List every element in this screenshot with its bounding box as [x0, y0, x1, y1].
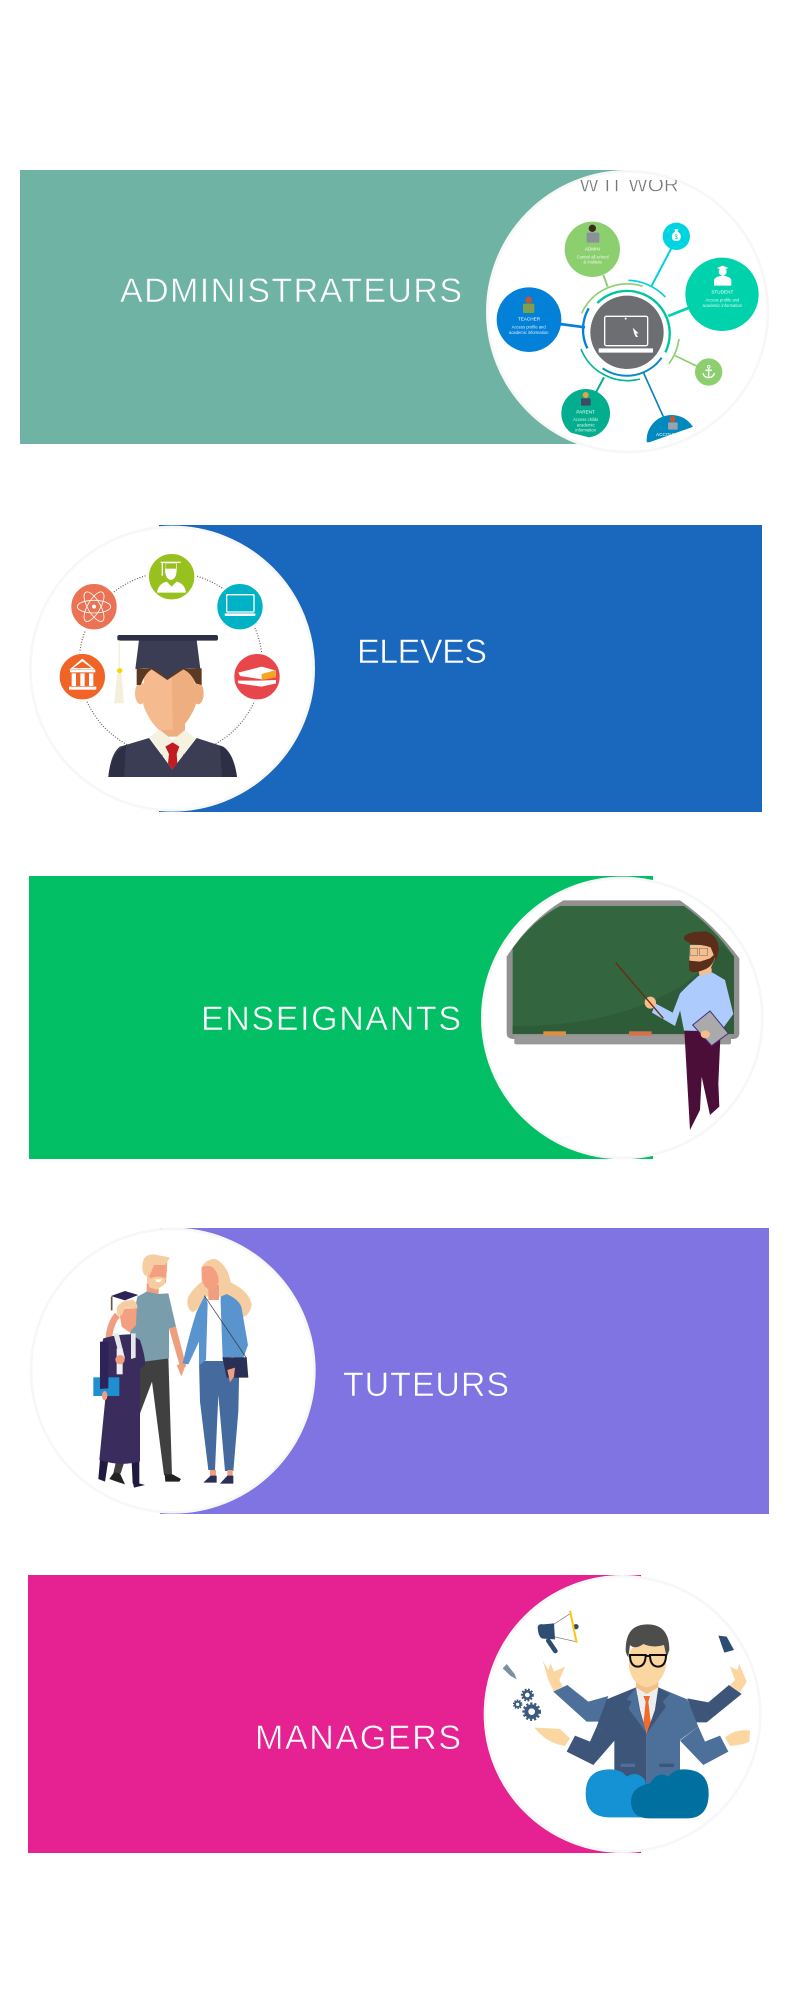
clipped heading: how it works: HOW IT WORKS	[548, 173, 706, 196]
diploma	[117, 1348, 123, 1374]
band: pink	[28, 1575, 641, 1853]
panel: enseignants	[29, 876, 762, 1159]
band: purple	[160, 1228, 769, 1514]
tie	[643, 1696, 651, 1733]
icon: books	[233, 653, 281, 700]
pointer	[616, 963, 663, 1018]
upper arms	[553, 1685, 608, 1722]
face	[202, 1266, 220, 1290]
tassel	[109, 1297, 114, 1310]
jacket	[597, 1687, 647, 1787]
father	[109, 1254, 187, 1484]
upper hands	[543, 1661, 747, 1693]
jacket right	[221, 1294, 248, 1372]
panel: managers	[28, 1575, 760, 1853]
pockets	[621, 1764, 635, 1767]
cap	[135, 640, 200, 679]
arm	[169, 1327, 186, 1367]
trousers	[113, 1357, 172, 1475]
illustration: multitasking manager	[485, 1576, 760, 1852]
sash	[113, 1333, 136, 1359]
node: money: $	[675, 235, 679, 241]
node: parent: information	[575, 428, 597, 433]
circle background	[485, 1576, 760, 1852]
icon: bank	[59, 653, 106, 700]
glasses	[630, 1655, 666, 1667]
illustration: teacher at blackboard	[482, 878, 762, 1158]
mother	[183, 1259, 252, 1484]
cap board	[117, 635, 218, 641]
tie	[165, 742, 179, 769]
left cloud	[586, 1769, 650, 1817]
shoes	[109, 1472, 181, 1484]
node: student: STUDENT	[711, 290, 733, 295]
infographic canvas	[20, 170, 769, 1853]
lower hands	[534, 1728, 750, 1746]
manager figure	[534, 1624, 750, 1818]
label: tuteurs: TUTEURS	[343, 1366, 509, 1404]
hair	[684, 931, 719, 961]
hand	[115, 1355, 125, 1364]
central laptop disc	[590, 296, 664, 369]
node: anchor	[695, 358, 722, 386]
circle background	[30, 527, 314, 810]
icon: gears	[514, 1690, 539, 1719]
beard	[146, 1273, 166, 1290]
hair	[626, 1624, 669, 1657]
jacket left	[183, 1295, 208, 1366]
gown sleeves	[108, 745, 237, 777]
cap	[111, 1291, 138, 1300]
face	[629, 1644, 666, 1687]
band: teal	[20, 170, 627, 444]
gown	[99, 1334, 145, 1464]
shoes	[133, 1482, 145, 1488]
illustration: graduate student	[30, 527, 314, 810]
node: parent: PARENT	[576, 409, 595, 414]
panel: tuteurs	[31, 1228, 769, 1514]
neck	[208, 1285, 219, 1300]
tassel	[114, 640, 124, 703]
blackboard	[507, 900, 739, 1044]
rings around the laptop	[581, 280, 679, 381]
beard	[689, 953, 716, 972]
face	[689, 945, 715, 970]
panel: administrateurs	[20, 170, 768, 465]
node: student	[685, 258, 759, 331]
sleeve	[100, 1342, 109, 1389]
gown	[108, 738, 237, 777]
hand	[227, 1368, 235, 1382]
tablet hand	[701, 1030, 710, 1038]
graduate child	[93, 1291, 145, 1488]
hair	[142, 1254, 170, 1276]
arm around child	[109, 1315, 117, 1357]
node: admin: Control all school	[577, 254, 609, 259]
label: eleves: ELEVES	[357, 633, 487, 671]
node: teacher: academic information	[509, 330, 549, 335]
node: admin: & Institute	[583, 260, 603, 265]
glasses	[690, 948, 708, 955]
face	[119, 1308, 137, 1332]
graduate figure	[108, 635, 237, 777]
chalk	[629, 1031, 652, 1036]
node: student: academic information	[703, 303, 743, 308]
icon: megaphone	[538, 1611, 579, 1651]
shirt arm	[652, 985, 688, 1026]
shirt	[679, 973, 733, 1031]
dotted orbit	[79, 572, 262, 756]
hand	[645, 997, 656, 1009]
smile	[155, 1279, 163, 1282]
collar	[149, 730, 196, 763]
band: blue	[159, 525, 762, 812]
connector lines	[560, 248, 697, 417]
label: managers: MANAGERS	[255, 1719, 461, 1757]
node: parent: Access childs	[573, 417, 598, 422]
circle background	[487, 171, 768, 452]
teacher figure	[616, 931, 733, 1130]
lower arms	[567, 1727, 615, 1765]
node: parent	[561, 389, 610, 438]
illustration: family with graduate	[31, 1229, 314, 1512]
node: accounting	[646, 415, 693, 442]
book	[93, 1377, 119, 1396]
node: student: Access profile and	[705, 298, 740, 303]
band: green	[29, 876, 653, 1159]
eraser	[543, 1031, 566, 1036]
pants	[199, 1361, 239, 1471]
chalk tray	[514, 1036, 731, 1044]
neck	[147, 1283, 159, 1297]
illustration: how it works diagram	[487, 171, 768, 465]
hair fringe	[202, 1259, 222, 1285]
hair	[117, 1300, 137, 1316]
hair	[137, 668, 202, 685]
face	[146, 1262, 167, 1289]
icon: pencil	[503, 1664, 517, 1679]
book hand	[102, 1391, 107, 1400]
icon: laptop	[216, 583, 264, 630]
bag strap	[204, 1296, 247, 1358]
lapels	[627, 1687, 647, 1733]
neck	[159, 717, 185, 737]
panel: eleves	[30, 525, 762, 812]
icon: document fragment	[718, 1636, 734, 1653]
right cloud	[631, 1769, 709, 1818]
ears	[135, 682, 146, 704]
bag	[222, 1357, 248, 1378]
legs	[98, 1460, 139, 1483]
node: admin: ADMIN	[585, 247, 600, 252]
label: enseignants: ENSEIGNANTS	[201, 1000, 461, 1038]
node: money	[663, 223, 690, 250]
holding hands	[177, 1362, 187, 1376]
shirt	[206, 1300, 223, 1361]
shoes	[203, 1476, 233, 1484]
shirt	[636, 1687, 658, 1733]
node: admin	[565, 222, 620, 277]
node: parent: academic	[577, 422, 595, 427]
node: teacher	[497, 287, 561, 352]
hair	[187, 1259, 252, 1317]
face	[143, 668, 196, 730]
icon: atom	[70, 583, 118, 630]
node: accounting: ACCOUNTING	[656, 432, 688, 437]
neck	[636, 1678, 658, 1695]
neck	[698, 968, 712, 980]
tablet	[693, 1011, 728, 1046]
circle background	[31, 1229, 314, 1512]
label: administrateurs: ADMINISTRATEURS	[120, 272, 462, 310]
ankles	[210, 1470, 233, 1477]
trousers	[684, 1031, 721, 1130]
node: teacher: TEACHER	[518, 317, 541, 322]
node: teacher: Access profile and	[512, 325, 546, 330]
t-shirt	[130, 1292, 176, 1362]
circle background	[482, 878, 762, 1158]
icon: graduate	[148, 553, 195, 600]
